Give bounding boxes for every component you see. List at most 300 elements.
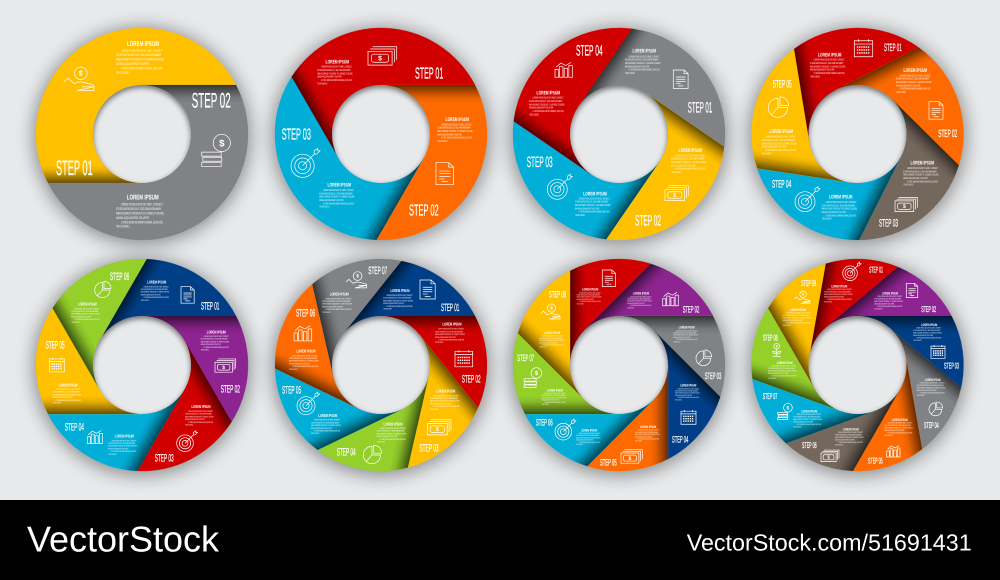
panel: step 06 brown: STEP 06 bbox=[802, 440, 817, 450]
panel: step 06 brown bbox=[785, 354, 900, 481]
text block: MAGNA ALIQUAM ERAT VOLUTPAT. bbox=[108, 447, 128, 450]
text block: TRUD EXERCI bbox=[810, 74, 820, 78]
icon: pie chart bbox=[95, 281, 111, 298]
text block: NIBH EUISMOD TINCIDUNT UT LAOREET DOLORE bbox=[577, 296, 602, 299]
text block: NIBH EUISMOD TINCIDUNT UT LAOREET DOLORE bbox=[903, 173, 939, 177]
hole bbox=[93, 85, 191, 183]
heading: lorem ipsum: LOREM IPSUM bbox=[679, 326, 695, 330]
wheel: 5 steps bbox=[744, 17, 986, 261]
panel: step 01 red bbox=[570, 259, 651, 365]
heading: lorem ipsum: LOREM IPSUM bbox=[115, 434, 134, 439]
text block: UT WISI ENIM AD MINIM VENIAM, QUIS NOS bbox=[544, 401, 566, 404]
text block: NIBH EUISMOD TINCIDUNT UT LAOREET DOLORE bbox=[913, 332, 942, 335]
panel: step 04 navy: STEP 04 bbox=[672, 435, 688, 445]
text block: LOREM IPSUM DOLOR SIT AMET, CONSECT bbox=[325, 297, 352, 300]
text block: TRUD EXERCI bbox=[322, 311, 331, 314]
text block: ETUER ADIPISCING ELIT, SED DIAM NONUMMY bbox=[793, 415, 821, 418]
text block: MAGNA ALIQUAM ERAT VOLUTPAT. bbox=[529, 106, 554, 110]
heading: lorem ipsum: LOREM IPSUM bbox=[442, 322, 462, 327]
text block: UT WISI ENIM AD MINIM VENIAM, QUIS NOS bbox=[325, 308, 352, 311]
heading: lorem ipsum: LOREM IPSUM bbox=[829, 195, 852, 201]
icon: pie chart bbox=[768, 97, 789, 117]
icon: coins: $ bbox=[219, 138, 225, 149]
panel: step 02 orange: STEP 02 bbox=[409, 203, 439, 220]
text block: TRUD EXERCI bbox=[311, 432, 320, 435]
panel: step 03 cyan: STEP 03 bbox=[282, 126, 311, 143]
panel: step 01 grey: STEP 01 bbox=[688, 100, 712, 117]
text block: LOREM IPSUM DOLOR SIT AMET, CONSECT bbox=[825, 200, 857, 204]
panel: step 08 yellow: STEP 08 bbox=[549, 289, 566, 299]
text block: NIBH EUISMOD TINCIDUNT UT LAOREET DOLORE bbox=[576, 436, 601, 439]
heading: lorem ipsum: LOREM IPSUM bbox=[921, 323, 937, 327]
text block: UT WISI ENIM AD MINIM VENIAM, QUIS NOS bbox=[629, 68, 660, 72]
text block: ETUER ADIPISCING ELIT, SED DIAM NONUMMY bbox=[671, 157, 704, 161]
text block: MAGNA ALIQUAM ERAT VOLUTPAT. bbox=[822, 210, 847, 214]
text block: LOREM IPSUM DOLOR SIT AMET, CONSECT bbox=[907, 166, 938, 170]
panel: step 03 cyan bbox=[236, 77, 426, 250]
text block: UT WISI ENIM AD MINIM VENIAM, QUIS NOS bbox=[887, 432, 913, 435]
heading: lorem ipsum: LOREM IPSUM bbox=[777, 361, 793, 365]
panel: step 01 yellow: STEP 01 bbox=[56, 157, 93, 180]
text block: NIBH EUISMOD TINCIDUNT UT LAOREET DOLORE bbox=[835, 436, 864, 439]
heading: lorem ipsum: LOREM IPSUM bbox=[925, 378, 941, 382]
text block: LOREM IPSUM DOLOR SIT AMET, CONSECT bbox=[56, 388, 81, 391]
text block: ETUER ADIPISCING ELIT, SED DIAM NONUMMY bbox=[835, 433, 862, 436]
text block: ETUER ADIPISCING ELIT, SED DIAM NONUMMY bbox=[635, 431, 659, 434]
text block: MAGNA ALIQUAM ERAT VOLUTPAT. bbox=[625, 64, 650, 68]
text block: UT WISI ENIM AD MINIM VENIAM, QUIS NOS bbox=[56, 399, 81, 402]
panel: step 03 cyan: STEP 03 bbox=[527, 154, 553, 171]
text block: ETUER ADIPISCING ELIT, SED DIAM NONUMMY bbox=[768, 367, 796, 370]
text block: NIBH EUISMOD TINCIDUNT UT LAOREET DOLORE bbox=[675, 392, 700, 395]
text block: NIBH EUISMOD TINCIDUNT UT LAOREET DOLORE bbox=[289, 360, 319, 363]
icon: pie chart bbox=[696, 350, 712, 366]
text block: MAGNA ALIQUAM ERAT VOLUTPAT. bbox=[141, 293, 161, 296]
text block: ETUER ADIPISCING ELIT, SED DIAM NONUMMY bbox=[201, 338, 228, 341]
heading: lorem ipsum: LOREM IPSUM bbox=[801, 409, 817, 413]
text block: ETUER ADIPISCING ELIT, SED DIAM NONUMMY bbox=[539, 337, 563, 340]
text block: TRUD EXERCI bbox=[913, 339, 922, 342]
heading: lorem ipsum: LOREM IPSUM bbox=[59, 382, 78, 387]
text block: LOREM IPSUM DOLOR SIT AMET, CONSECT bbox=[675, 153, 706, 157]
text block: TRUD EXERCI bbox=[437, 139, 447, 143]
heading: lorem ipsum: LOREM IPSUM bbox=[583, 191, 607, 197]
panel: step 03 brown: STEP 03 bbox=[879, 217, 898, 229]
text block: MAGNA ALIQUAM ERAT VOLUTPAT. bbox=[185, 418, 205, 421]
panel: step 05 yellow: STEP 05 bbox=[46, 339, 65, 351]
panel: step 04 cyan: STEP 04 bbox=[772, 179, 791, 191]
text block: ETUER ADIPISCING ELIT, SED DIAM NONUMMY bbox=[71, 310, 99, 313]
text block: MAGNA ALIQUAM ERAT VOLUTPAT. bbox=[896, 83, 921, 87]
text block: NIBH EUISMOD TINCIDUNT UT LAOREET DOLORE bbox=[71, 313, 100, 316]
panel: step 03 navy: STEP 03 bbox=[944, 361, 959, 371]
text block: TRUD EXERCI bbox=[575, 213, 585, 217]
text block: LOREM IPSUM DOLOR SIT AMET, CONSECT bbox=[838, 431, 863, 434]
panel: step 07 grey bbox=[310, 252, 423, 376]
text block: MAGNA ALIQUAM ERAT VOLUTPAT. bbox=[575, 206, 600, 210]
panel: step 04 red bbox=[504, 0, 672, 174]
text block: TRUD EXERCI bbox=[317, 81, 327, 85]
panel: step 02 yellow: STEP 02 bbox=[635, 212, 661, 229]
text block: UT WISI ENIM AD MINIM VENIAM, QUIS NOS bbox=[920, 392, 945, 395]
text block: UT WISI ENIM AD MINIM VENIAM, QUIS NOS bbox=[204, 346, 229, 349]
text block: UT WISI ENIM AD MINIM VENIAM, QUIS NOS bbox=[121, 66, 163, 70]
heading: lorem ipsum: LOREM IPSUM bbox=[78, 302, 97, 307]
panel: step 04 grey bbox=[843, 327, 970, 451]
icon: target bbox=[297, 392, 320, 415]
panel: step 04 navy bbox=[596, 330, 729, 462]
panel: step 05 yellow: STEP 05 bbox=[773, 78, 792, 90]
panel: step 05 orange bbox=[835, 356, 924, 473]
text block: TRUD EXERCI bbox=[884, 434, 893, 437]
icon: hand with coin: $ bbox=[356, 273, 359, 279]
text block: ETUER ADIPISCING ELIT, SED DIAM NONUMMY bbox=[383, 297, 412, 300]
heading: lorem ipsum: LOREM IPSUM bbox=[679, 148, 702, 154]
text block: NIBH EUISMOD TINCIDUNT UT LAOREET DOLORE bbox=[884, 427, 913, 430]
text block: MAGNA ALIQUAM ERAT VOLUTPAT. bbox=[874, 302, 895, 305]
panel: step 04 red: STEP 04 bbox=[576, 43, 603, 60]
text block: ETUER ADIPISCING ELIT, SED DIAM NONUMMY bbox=[141, 288, 168, 291]
text block: UT WISI ENIM AD MINIM VENIAM, QUIS NOS bbox=[386, 305, 413, 308]
panel: step 04 green: STEP 04 bbox=[337, 447, 356, 459]
text block: MAGNA ALIQUAM ERAT VOLUTPAT. bbox=[322, 305, 343, 308]
heading: lorem ipsum: LOREM IPSUM bbox=[207, 329, 226, 334]
icon: calendar bbox=[49, 358, 64, 372]
text block: LOREM IPSUM DOLOR SIT AMET, CONSECT bbox=[796, 413, 822, 416]
text block: LOREM IPSUM DOLOR SIT AMET, CONSECT bbox=[887, 422, 913, 425]
text block: ETUER ADIPISCING ELIT, SED DIAM NONUMMY bbox=[377, 430, 405, 433]
icon: coins: $ bbox=[535, 370, 538, 377]
text block: MAGNA ALIQUAM ERAT VOLUTPAT. bbox=[71, 315, 91, 318]
text block: LOREM IPSUM DOLOR SIT AMET, CONSECT bbox=[579, 196, 610, 200]
text block: NIBH EUISMOD TINCIDUNT UT LAOREET DOLORE bbox=[201, 340, 230, 343]
text block: MAGNA ALIQUAM ERAT VOLUTPAT. bbox=[576, 439, 594, 442]
heading: lorem ipsum: LOREM IPSUM bbox=[192, 404, 211, 409]
heading: lorem ipsum: LOREM IPSUM bbox=[640, 425, 656, 429]
text block: LOREM IPSUM DOLOR SIT AMET, CONSECT bbox=[786, 312, 811, 315]
text block: TRUD EXERCI bbox=[542, 403, 549, 406]
icon: target bbox=[291, 148, 320, 177]
panel: step 02 yellow bbox=[566, 94, 734, 272]
wheel: 6 steps bbox=[34, 245, 250, 485]
text block: ETUER ADIPISCING ELIT, SED DIAM NONUMMY bbox=[822, 203, 855, 207]
text block: UT WISI ENIM AD MINIM VENIAM, QUIS NOS bbox=[827, 298, 852, 301]
text block: NIBH EUISMOD TINCIDUNT UT LAOREET DOLORE bbox=[116, 58, 164, 62]
text block: ETUER ADIPISCING ELIT, SED DIAM NONUMMY bbox=[116, 207, 161, 211]
heading: lorem ipsum: LOREM IPSUM bbox=[147, 279, 167, 284]
wheel: 9 steps bbox=[741, 252, 970, 481]
panel: step 08 yellow bbox=[509, 268, 642, 400]
text block: UT WISI ENIM AD MINIM VENIAM, QUIS NOS bbox=[438, 339, 464, 342]
text block: LOREM IPSUM DOLOR SIT AMET, CONSECT bbox=[438, 328, 465, 331]
panel: step 01 yellow bbox=[36, 28, 236, 183]
text block: NIBH EUISMOD TINCIDUNT UT LAOREET DOLORE bbox=[874, 300, 903, 303]
icon: calendar bbox=[455, 350, 473, 367]
text block: NIBH EUISMOD TINCIDUNT UT LAOREET DOLORE bbox=[108, 445, 137, 448]
heading: lorem ipsum: LOREM IPSUM bbox=[390, 288, 410, 293]
icon: document bbox=[673, 70, 688, 88]
icon: banknotes bbox=[368, 47, 397, 65]
text block: LOREM IPSUM DOLOR SIT AMET, CONSECT bbox=[676, 329, 698, 332]
panel: step 04 grey: STEP 04 bbox=[924, 420, 939, 430]
text block: ETUER ADIPISCING ELIT, SED DIAM NONUMMY bbox=[116, 53, 161, 57]
text block: TRUD EXERCI bbox=[116, 225, 130, 229]
text block: LOREM IPSUM DOLOR SIT AMET, CONSECT bbox=[441, 122, 472, 126]
text block: NIBH EUISMOD TINCIDUNT UT LAOREET DOLORE bbox=[185, 415, 214, 418]
text block: MAGNA ALIQUAM ERAT VOLUTPAT. bbox=[383, 302, 404, 305]
text block: NIBH EUISMOD TINCIDUNT UT LAOREET DOLORE bbox=[762, 141, 797, 145]
text block: ETUER ADIPISCING ELIT, SED DIAM NONUMMY bbox=[917, 384, 944, 387]
wheel: 8 steps bbox=[509, 255, 729, 475]
text block: UT WISI ENIM AD MINIM VENIAM, QUIS NOS bbox=[314, 430, 340, 433]
text block: TRUD EXERCI bbox=[435, 341, 444, 344]
text block: MAGNA ALIQUAM ERAT VOLUTPAT. bbox=[671, 163, 696, 167]
text block: ETUER ADIPISCING ELIT, SED DIAM NONUMMY bbox=[430, 397, 458, 400]
icon: target bbox=[843, 262, 861, 281]
text block: UT WISI ENIM AD MINIM VENIAM, QUIS NOS bbox=[765, 148, 796, 152]
text block: LOREM IPSUM DOLOR SIT AMET, CONSECT bbox=[323, 188, 354, 192]
text block: ETUER ADIPISCING ELIT, SED DIAM NONUMMY bbox=[824, 290, 851, 293]
panel: step 04 cyan: STEP 04 bbox=[65, 421, 84, 433]
text block: MAGNA ALIQUAM ERAT VOLUTPAT. bbox=[289, 362, 310, 365]
text block: LOREM IPSUM DOLOR SIT AMET, CONSECT bbox=[74, 307, 100, 310]
text block: TRUD EXERCI bbox=[903, 183, 913, 187]
text block: MAGNA ALIQUAM ERAT VOLUTPAT. bbox=[430, 402, 451, 405]
panel: step 04 cyan bbox=[40, 337, 184, 481]
text block: ETUER ADIPISCING ELIT, SED DIAM NONUMMY bbox=[311, 421, 339, 424]
text block: NIBH EUISMOD TINCIDUNT UT LAOREET DOLORE bbox=[435, 333, 465, 336]
heading: lorem ipsum: LOREM IPSUM bbox=[904, 68, 927, 74]
text block: UT WISI ENIM AD MINIM VENIAM, QUIS NOS bbox=[796, 423, 822, 426]
text block: TRUD EXERCI bbox=[671, 170, 681, 174]
panel: step 01 grey bbox=[579, 19, 757, 187]
text block: MAGNA ALIQUAM ERAT VOLUTPAT. bbox=[435, 336, 456, 339]
text block: NIBH EUISMOD TINCIDUNT UT LAOREET DOLORE bbox=[635, 433, 660, 436]
panel: step 03 grey: STEP 03 bbox=[705, 371, 721, 381]
text block: MAGNA ALIQUAM ERAT VOLUTPAT. bbox=[675, 394, 693, 397]
heading: lorem ipsum: LOREM IPSUM bbox=[127, 41, 159, 48]
panel: step 06 cyan: STEP 06 bbox=[536, 418, 553, 428]
text block: ETUER ADIPISCING ELIT, SED DIAM NONUMMY bbox=[185, 413, 212, 416]
panel: step 02 red bbox=[381, 316, 487, 408]
icon: pie chart bbox=[363, 445, 382, 464]
text block: ETUER ADIPISCING ELIT, SED DIAM NONUMMY bbox=[435, 330, 463, 333]
text block: ETUER ADIPISCING ELIT, SED DIAM NONUMMY bbox=[884, 424, 912, 427]
panel: step 08 green bbox=[741, 307, 865, 411]
text block: LOREM IPSUM DOLOR SIT AMET, CONSECT bbox=[920, 382, 945, 385]
panel: step 06 orange: STEP 06 bbox=[296, 307, 315, 319]
watermark url: VectorStock.com/51691431 bbox=[687, 530, 972, 556]
text block: MAGNA ALIQUAM ERAT VOLUTPAT. bbox=[577, 298, 594, 301]
text block: TRUD EXERCI bbox=[108, 453, 117, 456]
text block: LOREM IPSUM DOLOR SIT AMET, CONSECT bbox=[121, 203, 163, 207]
text block: UT WISI ENIM AD MINIM VENIAM, QUIS NOS bbox=[771, 375, 797, 378]
text block: ETUER ADIPISCING ELIT, SED DIAM NONUMMY bbox=[625, 58, 658, 62]
text block: TRUD EXERCI bbox=[675, 398, 682, 401]
icon: banknotes: $ bbox=[827, 455, 830, 460]
text block: ETUER ADIPISCING ELIT, SED DIAM NONUMMY bbox=[896, 77, 929, 81]
text block: ETUER ADIPISCING ELIT, SED DIAM NONUMMY bbox=[575, 200, 608, 204]
text block: UT WISI ENIM AD MINIM VENIAM, QUIS NOS bbox=[144, 296, 169, 299]
text block: TRUD EXERCI bbox=[673, 340, 681, 343]
text block: LOREM IPSUM DOLOR SIT AMET, CONSECT bbox=[629, 54, 660, 58]
text block: MAGNA ALIQUAM ERAT VOLUTPAT. bbox=[903, 176, 928, 180]
hole bbox=[570, 316, 668, 414]
text block: MAGNA ALIQUAM ERAT VOLUTPAT. bbox=[542, 399, 559, 402]
text block: NIBH EUISMOD TINCIDUNT UT LAOREET DOLORE bbox=[822, 207, 857, 211]
text block: ETUER ADIPISCING ELIT, SED DIAM NONUMMY bbox=[762, 138, 795, 142]
text block: MAGNA ALIQUAM ERAT VOLUTPAT. bbox=[635, 435, 653, 438]
text block: ETUER ADIPISCING ELIT, SED DIAM NONUMMY bbox=[317, 68, 351, 72]
text block: NIBH EUISMOD TINCIDUNT UT LAOREET DOLORE bbox=[319, 195, 355, 199]
icon: bar chart bbox=[663, 292, 678, 306]
text block: UT WISI ENIM AD MINIM VENIAM, QUIS NOS bbox=[292, 365, 318, 368]
text block: LOREM IPSUM DOLOR SIT AMET, CONSECT bbox=[630, 295, 652, 298]
panel: step 06 green bbox=[47, 245, 191, 390]
text block: MAGNA ALIQUAM ERAT VOLUTPAT. bbox=[762, 145, 787, 149]
panel: step 01 red bbox=[809, 252, 898, 369]
text block: UT WISI ENIM AD MINIM VENIAM, QUIS NOS bbox=[321, 78, 352, 82]
text block: NIBH EUISMOD TINCIDUNT UT LAOREET DOLORE bbox=[627, 300, 652, 303]
text block: NIBH EUISMOD TINCIDUNT UT LAOREET DOLORE bbox=[141, 291, 170, 294]
panel: step 01 red: STEP 01 bbox=[869, 265, 883, 275]
icon: banknotes bbox=[427, 420, 451, 435]
text block: UT WISI ENIM AD MINIM VENIAM, QUIS NOS bbox=[542, 343, 564, 346]
panel: step 03 red bbox=[93, 340, 237, 485]
icon: banknotes: $ bbox=[903, 203, 906, 209]
icon: banknotes bbox=[895, 197, 917, 212]
text block: TRUD EXERCI bbox=[430, 408, 439, 411]
text block: NIBH EUISMOD TINCIDUNT UT LAOREET DOLORE bbox=[377, 432, 407, 435]
text block: NIBH EUISMOD TINCIDUNT UT LAOREET DOLORE bbox=[673, 334, 698, 337]
heading: lorem ipsum: LOREM IPSUM bbox=[581, 428, 597, 432]
text block: LOREM IPSUM DOLOR SIT AMET, CONSECT bbox=[204, 335, 229, 338]
panel: step 05 yellow bbox=[36, 308, 142, 414]
watermark logo: VectorStock bbox=[27, 519, 220, 560]
text block: MAGNA ALIQUAM ERAT VOLUTPAT. bbox=[627, 302, 645, 305]
text block: NIBH EUISMOD TINCIDUNT UT LAOREET DOLORE bbox=[810, 64, 845, 68]
text block: LOREM IPSUM DOLOR SIT AMET, CONSECT bbox=[314, 419, 341, 422]
hole bbox=[332, 85, 430, 183]
wheel: 7 steps bbox=[264, 252, 489, 479]
text block: TRUD EXERCI bbox=[768, 377, 777, 380]
panel: step 04 green bbox=[316, 355, 429, 479]
icon: hand with coin: $ bbox=[550, 306, 553, 311]
panel: step 07 cyan: STEP 07 bbox=[763, 391, 777, 401]
panel: step 05 orange: STEP 05 bbox=[600, 458, 617, 468]
text block: UT WISI ENIM AD MINIM VENIAM, QUIS NOS bbox=[638, 437, 659, 440]
text block: NIBH EUISMOD TINCIDUNT UT LAOREET DOLORE bbox=[671, 160, 706, 164]
panel: step 03 yellow bbox=[347, 334, 485, 475]
text block: ETUER ADIPISCING ELIT, SED DIAM NONUMMY bbox=[53, 391, 80, 394]
text block: UT WISI ENIM AD MINIM VENIAM, QUIS NOS bbox=[676, 338, 698, 341]
text block: UT WISI ENIM AD MINIM VENIAM, QUIS NOS bbox=[916, 337, 942, 340]
icon: document bbox=[602, 270, 616, 286]
text block: LOREM IPSUM DOLOR SIT AMET, CONSECT bbox=[386, 294, 413, 297]
text block: LOREM IPSUM DOLOR SIT AMET, CONSECT bbox=[579, 291, 601, 294]
text block: LOREM IPSUM DOLOR SIT AMET, CONSECT bbox=[771, 365, 797, 368]
text block: UT WISI ENIM AD MINIM VENIAM, QUIS NOS bbox=[188, 421, 213, 424]
text block: MAGNA ALIQUAM ERAT VOLUTPAT. bbox=[917, 389, 937, 392]
text block: ETUER ADIPISCING ELIT, SED DIAM NONUMMY bbox=[529, 99, 562, 103]
text block: NIBH EUISMOD TINCIDUNT UT LAOREET DOLORE bbox=[322, 303, 352, 306]
text block: LOREM IPSUM DOLOR SIT AMET, CONSECT bbox=[814, 58, 845, 62]
text block: ETUER ADIPISCING ELIT, SED DIAM NONUMMY bbox=[108, 442, 136, 445]
text block: TRUD EXERCI bbox=[896, 90, 906, 94]
text block: TRUD EXERCI bbox=[793, 425, 802, 428]
text block: LOREM IPSUM DOLOR SIT AMET, CONSECT bbox=[765, 135, 797, 139]
text block: ETUER ADIPISCING ELIT, SED DIAM NONUMMY bbox=[627, 297, 651, 300]
icon: hand with coin: $ bbox=[802, 292, 804, 296]
text block: MAGNA ALIQUAM ERAT VOLUTPAT. bbox=[53, 396, 73, 399]
text block: ETUER ADIPISCING ELIT, SED DIAM NONUMMY bbox=[783, 314, 810, 317]
text block: LOREM IPSUM DOLOR SIT AMET, CONSECT bbox=[900, 73, 931, 77]
icon: document bbox=[181, 287, 194, 303]
text block: ETUER ADIPISCING ELIT, SED DIAM NONUMMY bbox=[577, 293, 600, 296]
text block: ETUER ADIPISCING ELIT, SED DIAM NONUMMY bbox=[810, 61, 843, 65]
panel: step 05 cyan bbox=[267, 326, 402, 455]
panel: step 02 purple: STEP 02 bbox=[221, 384, 240, 396]
icon: bar chart bbox=[87, 431, 102, 444]
heading: lorem ipsum: LOREM IPSUM bbox=[326, 59, 349, 65]
hole bbox=[808, 316, 906, 414]
text block: UT WISI ENIM AD MINIM VENIAM, QUIS NOS bbox=[433, 405, 459, 408]
panel: step 09 yellow bbox=[762, 262, 877, 390]
text block: NIBH EUISMOD TINCIDUNT UT LAOREET DOLORE bbox=[793, 418, 822, 421]
panel: step 02 orange bbox=[835, 42, 986, 200]
panel: step 02 purple: STEP 02 bbox=[683, 305, 699, 315]
icon: hand with coin: $ bbox=[79, 69, 83, 78]
panel: step 03 yellow: STEP 03 bbox=[419, 442, 439, 454]
text block: TRUD EXERCI bbox=[529, 112, 539, 116]
text block: MAGNA ALIQUAM ERAT VOLUTPAT. bbox=[793, 420, 814, 423]
text block: TRUD EXERCI bbox=[71, 321, 80, 324]
text block: UT WISI ENIM AD MINIM VENIAM, QUIS NOS bbox=[579, 210, 610, 214]
panel: step 06 green: STEP 06 bbox=[110, 271, 129, 283]
icon: calendar bbox=[681, 410, 696, 424]
text block: LOREM IPSUM DOLOR SIT AMET, CONSECT bbox=[827, 288, 852, 291]
icon: coins bbox=[202, 134, 230, 166]
text block: UT WISI ENIM AD MINIM VENIAM, QUIS NOS bbox=[825, 213, 856, 217]
text block: LOREM IPSUM DOLOR SIT AMET, CONSECT bbox=[188, 410, 213, 413]
text block: LOREM IPSUM DOLOR SIT AMET, CONSECT bbox=[544, 392, 566, 395]
text block: LOREM IPSUM DOLOR SIT AMET, CONSECT bbox=[533, 96, 564, 100]
text block: TRUD EXERCI bbox=[185, 424, 193, 426]
icon: banknotes bbox=[665, 186, 688, 201]
panel: step 05 orange: STEP 05 bbox=[868, 455, 883, 465]
panel: step 01 navy: STEP 01 bbox=[201, 301, 219, 313]
text block: UT WISI ENIM AD MINIM VENIAM, QUIS NOS bbox=[838, 441, 863, 444]
icon: target bbox=[547, 174, 572, 199]
panel: step 06 cyan bbox=[522, 342, 654, 475]
heading: lorem ipsum: LOREM IPSUM bbox=[882, 291, 898, 295]
text block: UT WISI ENIM AD MINIM VENIAM, QUIS NOS bbox=[814, 71, 845, 75]
text block: TRUD EXERCI bbox=[201, 348, 209, 352]
icon: calendar bbox=[854, 39, 873, 57]
text block: NIBH EUISMOD TINCIDUNT UT LAOREET DOLORE bbox=[53, 393, 82, 396]
icon: document bbox=[929, 102, 943, 119]
heading: lorem ipsum: LOREM IPSUM bbox=[818, 52, 841, 58]
heading: lorem ipsum: LOREM IPSUM bbox=[318, 413, 338, 418]
heading: lorem ipsum: LOREM IPSUM bbox=[384, 421, 403, 426]
heading: lorem ipsum: LOREM IPSUM bbox=[790, 308, 806, 312]
text block: MAGNA ALIQUAM ERAT VOLUTPAT. bbox=[913, 334, 934, 337]
panel: step 01 navy bbox=[100, 249, 244, 393]
text block: ETUER ADIPISCING ELIT, SED DIAM NONUMMY bbox=[874, 297, 902, 300]
panel: step 06 orange bbox=[264, 280, 400, 409]
icon: document bbox=[420, 280, 435, 299]
panel: step 01 red: STEP 01 bbox=[415, 65, 443, 82]
